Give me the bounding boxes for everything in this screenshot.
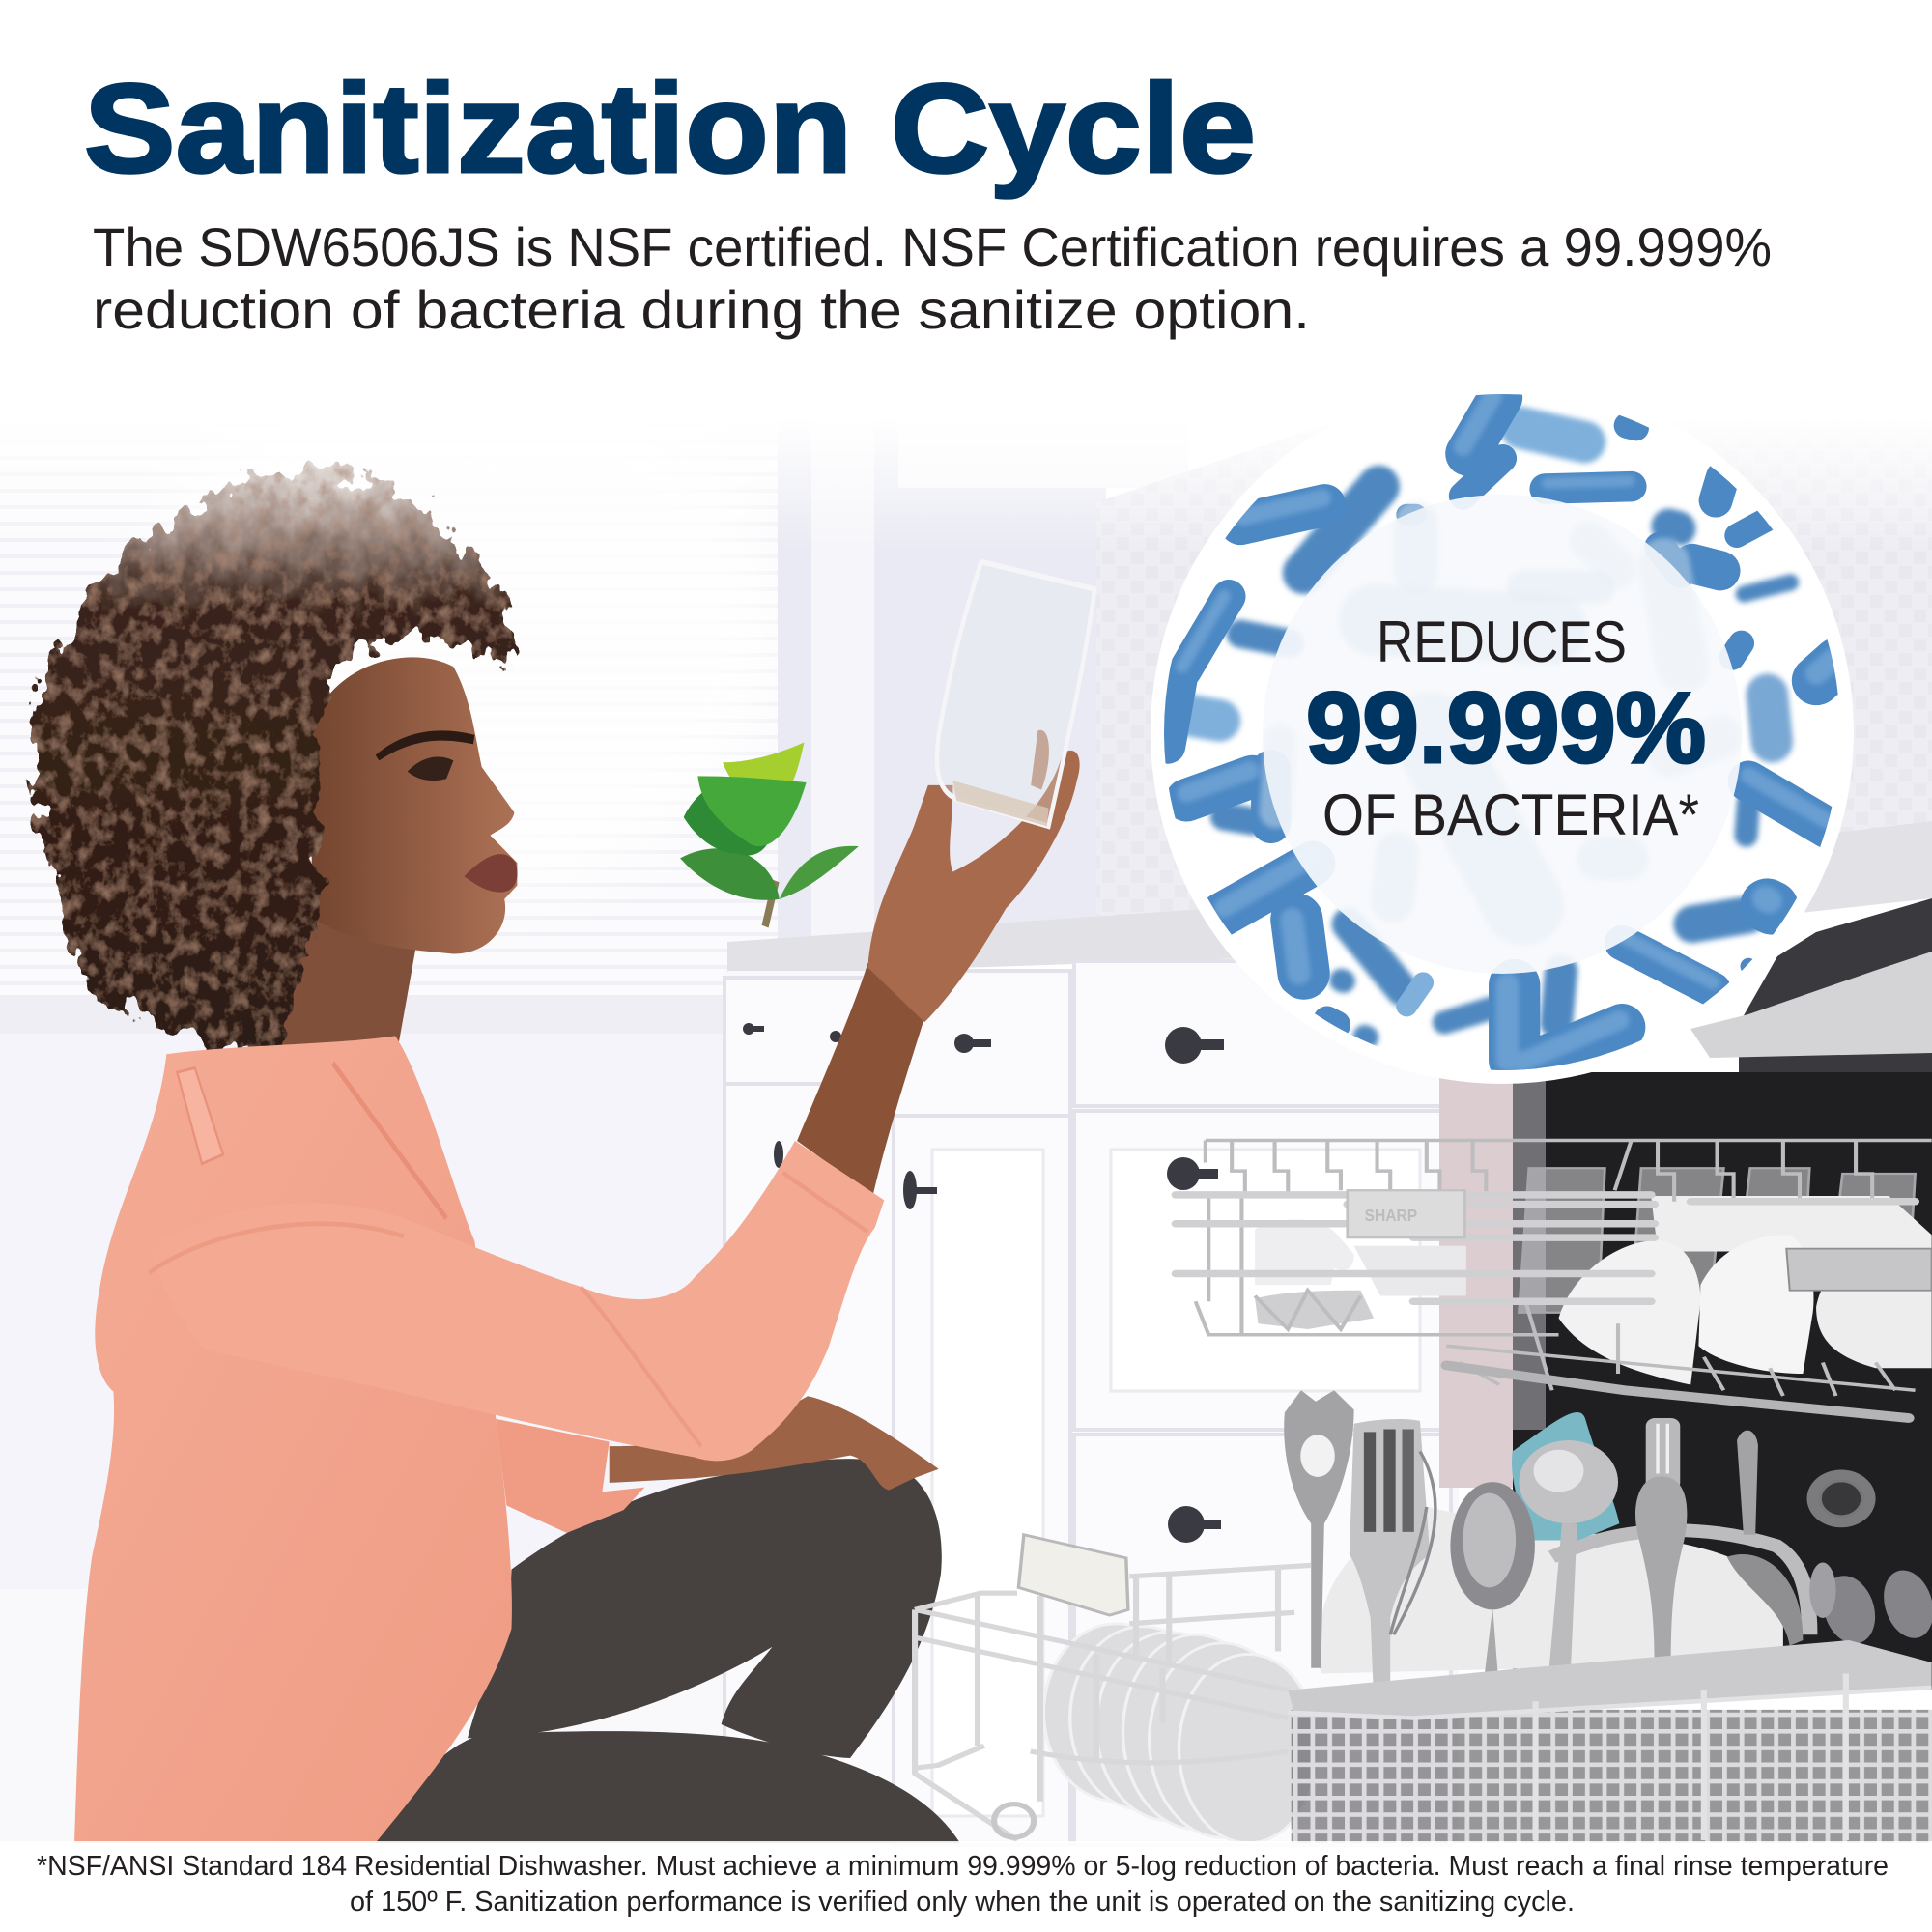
plant: [680, 742, 859, 926]
shoulder tab: [177, 1067, 223, 1164]
backsplash: [1096, 386, 1932, 927]
cabinets: [724, 961, 1459, 1845]
band background: [0, 1841, 1932, 1932]
whisk: [1390, 1451, 1435, 1634]
lower wall: [0, 1034, 744, 1594]
lower rack plates: [1043, 1624, 1318, 1843]
dishwasher racks and utensils: [915, 1140, 1932, 1843]
footnote line 1: *NSF/ANSI Standard 184 Residential Dishwasher. Must achieve a minimum 99.999% or 5-log reduction of bacteria. Must reach a final rinse temperature: [37, 1851, 1889, 1882]
eyebrow: [376, 730, 474, 760]
bacteria illustration: [1168, 395, 1837, 1069]
sleeve: [149, 1141, 884, 1461]
callout text: 99.999%: 99.999%: [1306, 672, 1706, 784]
inner door panels: [932, 1150, 1420, 1816]
hair: [34, 469, 518, 1048]
SHARP label: SHARP: [1365, 1207, 1417, 1225]
SHARP label: [1348, 1190, 1464, 1237]
faint rods inside inner circle: [1276, 522, 1720, 905]
spray arm vent: [1806, 1469, 1876, 1527]
glasses: [1519, 1168, 1916, 1313]
rod highlights: [1182, 395, 1833, 1063]
dishwasher dark interior: [1513, 1072, 1932, 1690]
footnote line 2: of 150º F. Sanitization performance is verified only when the unit is operated on the sanitizing cycle.: [350, 1887, 1575, 1918]
bacteria callout circle: [1151, 381, 1854, 1084]
rack base rail: [1446, 1365, 1909, 1418]
pink side panel: [1439, 1072, 1517, 1488]
countertop: [727, 821, 1932, 976]
footnote band: [0, 1841, 1932, 1932]
upper rack rails: [1176, 1195, 1916, 1301]
blurred rods: [1191, 428, 1791, 1037]
inner shirt tail cuff: [496, 1419, 644, 1533]
shirt body: [74, 1036, 512, 1843]
slotted turner: [1350, 1419, 1430, 1701]
pasta server: [1284, 1390, 1354, 1668]
neck: [276, 899, 432, 1154]
cutlery basket: [1288, 1640, 1932, 1843]
solid spoon: [1635, 1476, 1687, 1662]
shirt placket: [333, 1064, 446, 1218]
sharp rods: [1168, 397, 1837, 1069]
upper spray tray: [1690, 952, 1932, 1058]
upper cabinet: [898, 382, 1188, 488]
window sill: [0, 995, 744, 1034]
flat utensil back: [1646, 1418, 1758, 1535]
teaspoons: [1809, 1563, 1932, 1648]
face: [312, 657, 517, 953]
circle white border: [1151, 381, 1854, 1084]
legs: [376, 1459, 960, 1843]
rack slider: [1786, 1249, 1932, 1291]
subtitle line 1: The SDW6506JS is NSF certified. NSF Certification requires a 99.999%: [93, 216, 1772, 277]
bowl: [1255, 1291, 1374, 1329]
floor: [0, 1589, 744, 1845]
lower rack handle: [1018, 1535, 1128, 1615]
lower rack wires: [915, 1565, 1311, 1840]
eye: [408, 756, 453, 781]
raised arm: [797, 963, 924, 1196]
callout text: of bacteria: OF BACTERIA*: [1322, 782, 1699, 847]
cabinet knobs: [743, 1023, 1224, 1543]
teal spatula: [1512, 1412, 1619, 1540]
wall right of window: [778, 386, 1106, 947]
handle arc: [1552, 1530, 1809, 1634]
glass: [937, 562, 1094, 826]
upper rack wires: [1196, 1140, 1932, 1396]
sleeve fold: [149, 1173, 867, 1446]
tea cup: [1255, 1219, 1354, 1285]
subtitle text block: [93, 216, 1772, 340]
hand: [867, 751, 1080, 1022]
ladle: [1519, 1440, 1618, 1673]
wheel: [994, 1804, 1034, 1837]
translucent inner circle: [1263, 495, 1742, 974]
lower hand on knee: [610, 1396, 939, 1490]
small ladle: [1727, 1554, 1803, 1646]
large plates behind utensils: [1319, 1507, 1783, 1673]
upper rack dishes: [1255, 1168, 1932, 1385]
dishwasher door frame: [1513, 1072, 1546, 1430]
wall column: [811, 386, 874, 947]
slotted spoon: [1450, 1482, 1535, 1690]
left dish: [1354, 1246, 1466, 1296]
woman: [34, 469, 1094, 1843]
window with blinds: [0, 406, 782, 1005]
top fade to white: [0, 328, 1932, 551]
title: Sanitization Cycle: [84, 57, 1256, 199]
photo: kitchen room background: [0, 328, 1932, 1845]
subtitle line 2: reduction of bacteria during the sanitize option.: [93, 279, 1310, 340]
lips: [464, 854, 518, 893]
cups white: [1651, 1196, 1932, 1252]
callout text: reduces: REDUCES: [1377, 610, 1627, 674]
window brightness: [145, 357, 782, 898]
dishwasher upper dark area: [1739, 898, 1932, 1082]
